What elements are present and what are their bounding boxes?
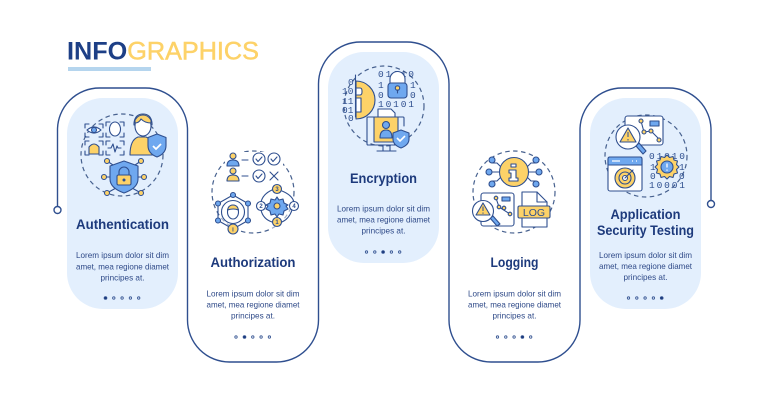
icon: application security testing [605, 115, 687, 197]
text: authorization: Lorem ipsum dolor sit dim [206, 288, 300, 298]
connecting outline [54, 42, 714, 362]
icon: application security testing: 1 [650, 162, 656, 173]
pagination dots [235, 336, 271, 338]
icon: application security testing: 10001 [649, 180, 685, 191]
icon: logging [472, 151, 555, 233]
pagination dots [496, 336, 532, 338]
icon: application security testing: 0 [650, 171, 656, 182]
icon: authorization: 3 [275, 187, 279, 193]
pagination dots [365, 251, 401, 253]
text: application security testing: principes at. [624, 272, 668, 282]
icon: application security testing: 01010 [649, 151, 685, 162]
text: application security testing: amet, mea regione diamet [599, 261, 693, 271]
title: INFOGRAPHICS [67, 38, 259, 66]
text: authentication: Lorem ipsum dolor sit dim [76, 250, 169, 260]
text: encryption: amet, mea regione diamet [337, 214, 431, 224]
text: logging [468, 288, 562, 320]
heading: authentication: Authentication [76, 217, 169, 232]
text: encryption [337, 204, 431, 236]
heading: application security testing [597, 207, 694, 238]
text: authentication [76, 250, 170, 282]
icon: encryption: 0 [348, 77, 354, 88]
panel: light backgrounds [67, 52, 701, 309]
text: encryption: principes at. [362, 226, 406, 236]
pagination dots [627, 297, 663, 299]
heading: application security testing: Security Testing [597, 223, 694, 238]
text: logging: Lorem ipsum dolor sit dim [468, 288, 561, 298]
text: application security testing: Lorem ipsum dolor sit dim [599, 250, 692, 260]
heading: logging: Logging [490, 255, 538, 270]
icon: logging: LOG [523, 207, 545, 219]
icon: encryption: 10 [342, 86, 354, 97]
panel: application security testing [597, 115, 694, 299]
panel: encryption [337, 66, 431, 253]
heading: encryption: Encryption [350, 171, 417, 186]
icon: authorization: 4 [292, 204, 296, 210]
text: logging: amet, mea regione diamet [468, 300, 562, 310]
heading: authorization: Authorization [210, 255, 296, 270]
icon: authorization: 1 [275, 220, 279, 226]
icon: encryption: 1 [378, 80, 384, 91]
icon: encryption: 10101 [378, 99, 414, 110]
text: authentication: principes at. [100, 272, 144, 282]
icon: encryption: 01 [342, 105, 354, 116]
pagination dots [104, 297, 140, 299]
icon: application security testing: 0 [679, 171, 685, 182]
icon: encryption: 0 [378, 90, 384, 101]
text: encryption: Lorem ipsum dolor sit dim [337, 204, 430, 214]
icon: application security testing: 1 [679, 162, 685, 173]
icon: encryption: 0 [348, 113, 354, 124]
icon: encryption [342, 66, 424, 151]
icon: authorization: 2 [259, 204, 263, 210]
text: application security testing [599, 250, 693, 282]
heading: application security testing: Application [610, 207, 680, 222]
panel: authentication [76, 114, 170, 299]
icon: encryption: 11 [342, 96, 354, 107]
icon: authentication [81, 114, 166, 196]
panel: authorization [206, 151, 304, 338]
icon: encryption: 0 [410, 90, 416, 101]
text: authorization [206, 288, 300, 320]
text: authentication: amet, mea regione diamet [76, 262, 170, 272]
panel: logging [468, 151, 562, 338]
text: logging: principes at. [492, 310, 536, 320]
icon: authorization [212, 151, 304, 234]
text: authorization: principes at. [231, 310, 275, 320]
icon: encryption: 1 [410, 80, 416, 91]
icon: encryption: 01010 [378, 69, 414, 80]
text: authorization: amet, mea regione diamet [206, 300, 300, 310]
icon: authorization: i [232, 228, 234, 234]
